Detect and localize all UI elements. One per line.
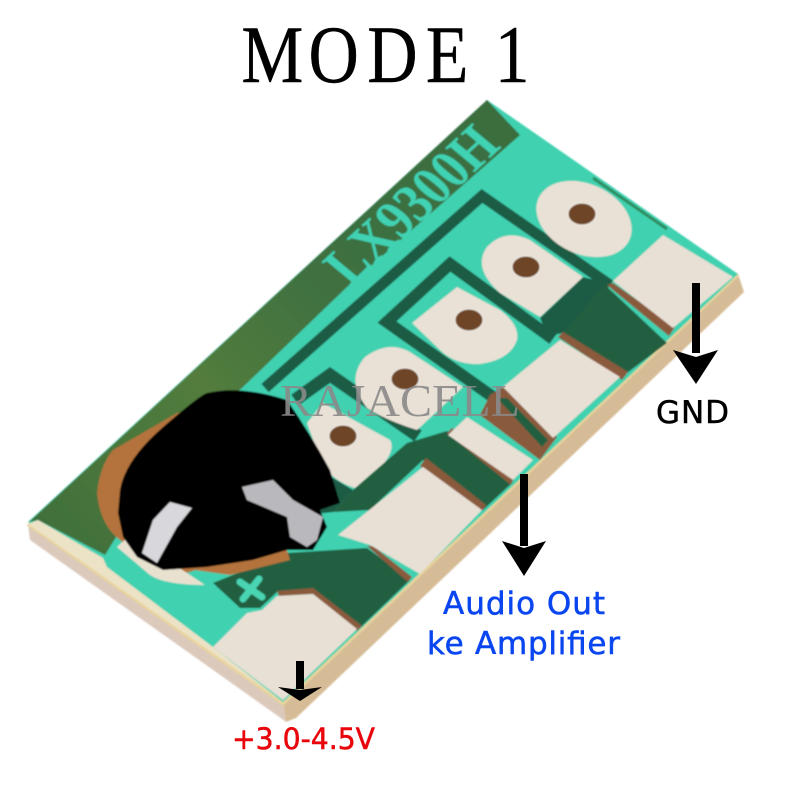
- title: MODE 1: [241, 10, 530, 100]
- epoxy highlight left: [142, 502, 192, 563]
- olive solder mask band: [29, 100, 520, 555]
- label: positive supply: +3.0-4.5V: [232, 722, 375, 756]
- dark band from epoxy to junction: [305, 470, 353, 515]
- cream lower edge strip: [28, 520, 283, 702]
- round contact pads with holes: [307, 166, 644, 488]
- dark traces: [265, 196, 610, 436]
- dark ground block: [563, 283, 667, 373]
- watermark: RAJACELL: [280, 375, 520, 426]
- cream area under blob: [117, 535, 205, 585]
- copper strips: [277, 283, 675, 631]
- dark junction block: [333, 431, 512, 512]
- contact pad 1: [524, 166, 644, 272]
- solder pad: narrow: [448, 417, 533, 480]
- plus sign marking: [240, 579, 262, 599]
- part number label: LX9300H: [310, 114, 512, 295]
- centre strip group: [480, 387, 557, 460]
- epoxy highlight right: [242, 480, 323, 547]
- board top surface: [28, 100, 738, 702]
- label: audio out: Audio Out: [443, 586, 605, 622]
- arrow: GND: [673, 283, 718, 384]
- solder pad: audio out: [338, 467, 482, 574]
- board edge thickness: [28, 274, 744, 722]
- drill holes: [329, 203, 596, 447]
- arrow: audio out: [502, 474, 546, 576]
- label: audio out: ke Amplifier: [427, 626, 620, 662]
- black epoxy blob: [118, 390, 340, 570]
- contact pad 2: [482, 235, 583, 317]
- dark link to ground block: [540, 277, 606, 336]
- copper ring under epoxy: [97, 400, 290, 575]
- right edge dark line: [593, 178, 667, 229]
- contact pad 3: [412, 287, 517, 364]
- label: GND: GND: [656, 395, 729, 431]
- dark strip middle: [497, 398, 548, 447]
- contact pad 5: [307, 403, 392, 488]
- solder pad: GND: [613, 235, 733, 328]
- circuit board photo: [28, 100, 744, 722]
- arrow: positive supply: [278, 661, 322, 701]
- dark plus-terminal region: [213, 548, 410, 628]
- contact pad 4: [355, 347, 463, 430]
- solder pad: middle: [503, 340, 620, 438]
- copper strips middle: [480, 387, 557, 460]
- solder pad: positive supply: [213, 594, 357, 700]
